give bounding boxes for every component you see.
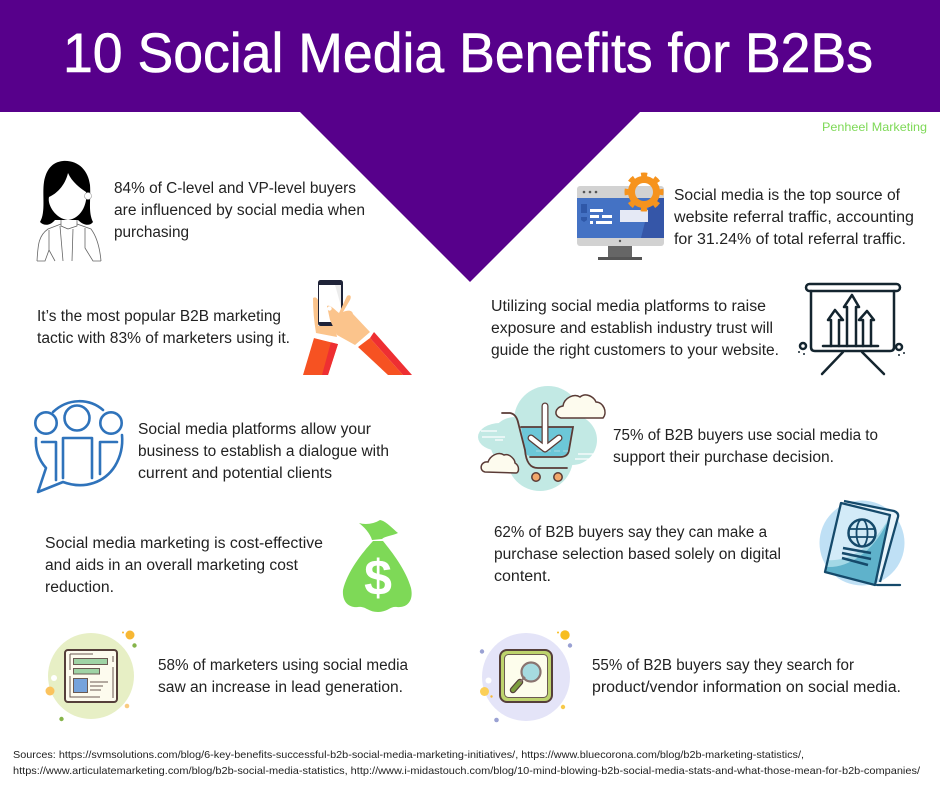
text: industry trust	[491, 298, 779, 359]
icon: shopping cart with clouds	[478, 386, 605, 491]
text: cost effective: and aids in an overall marketing cost	[45, 557, 299, 574]
text: dialogue: Social media platforms allow your	[138, 421, 371, 438]
text: industry trust: Utilizing social media platforms to raise	[491, 298, 766, 315]
icon: money bag: $	[364, 550, 392, 606]
text: vendor search: 55% of B2B buyers say they search for	[592, 657, 854, 674]
icon: money bag	[343, 520, 412, 612]
text: lead generation: 58% of marketers using social media	[158, 657, 408, 674]
text: popular tactic: tactic with 83% of marketers using it.	[37, 330, 290, 347]
text: cost effective: Social media marketing is cost-effective	[45, 535, 323, 552]
icon: hand holding phone	[303, 280, 412, 375]
icon: presentation board with arrows	[799, 284, 904, 374]
text: purchase decision	[613, 427, 878, 466]
text: cost effective	[45, 535, 323, 596]
text: digital content: 62% of B2B buyers say they can make a	[494, 524, 767, 541]
text: dialogue: current and potential clients	[138, 465, 332, 482]
text: referral traffic: Social media is the top source of	[674, 187, 901, 204]
brand credit: Penheel Marketing	[822, 120, 927, 134]
text: C-level buyers: purchasing	[114, 224, 189, 241]
icon: people in speech bubble	[35, 401, 122, 492]
text: lead generation	[158, 657, 408, 696]
title: 10 Social Media Benefits for B2Bs	[63, 21, 873, 84]
text: industry trust: guide the right customers to your website.	[491, 342, 779, 359]
icon: woman avatar	[37, 161, 101, 261]
text: vendor search	[592, 657, 901, 696]
icon: monitor with gear	[577, 175, 664, 260]
text: digital content: purchase selection based solely on digital	[494, 546, 781, 563]
text: digital content	[494, 524, 781, 585]
icon: passport	[820, 500, 904, 586]
text: digital content: content.	[494, 568, 551, 585]
text: popular tactic: It’s the most popular B2B marketing	[37, 308, 281, 325]
text: purchase decision: 75% of B2B buyers use social media to	[613, 427, 878, 444]
text: cost effective: reduction.	[45, 579, 114, 596]
text: lead generation: saw an increase in lead generation.	[158, 679, 403, 696]
text: purchase decision: support their purchase decision.	[613, 449, 834, 466]
icon: magnifying glass tile	[480, 630, 572, 722]
text: referral traffic: for 31.24% of total referral traffic.	[674, 231, 906, 248]
header banner	[0, 0, 940, 282]
text: C-level buyers: are influenced by social media when	[114, 202, 365, 219]
text: vendor search: product/vendor information on social media.	[592, 679, 901, 696]
icon: article document	[46, 630, 137, 721]
text: industry trust: exposure and establish industry trust will	[491, 320, 773, 337]
sources: Sources: https://svmsolutions.com/blog/6-key-benefits-successful-b2b-social-media-marketing-initiatives/, https://www.bluecorona.com/blog/b2b-marketing-statistics/,	[13, 749, 804, 761]
sources	[13, 749, 920, 777]
sources: https://www.articulatemarketing.com/blog/b2b-social-media-statistics, http://www.i-midastouch.com/blog/10-mind-blowing-b2b-social-media-stats-and-what-those-mean-for-b2b-companies/	[13, 765, 920, 777]
text: dialogue: business to establish a dialogue with	[138, 443, 389, 460]
text: popular tactic	[37, 308, 290, 347]
text: referral traffic: website referral traffic, accounting	[673, 209, 914, 226]
text: C-level buyers	[114, 180, 365, 241]
text: dialogue	[138, 421, 389, 482]
text: referral traffic	[673, 187, 914, 248]
text: C-level buyers: 84% of C-level and VP-level buyers	[114, 180, 356, 197]
